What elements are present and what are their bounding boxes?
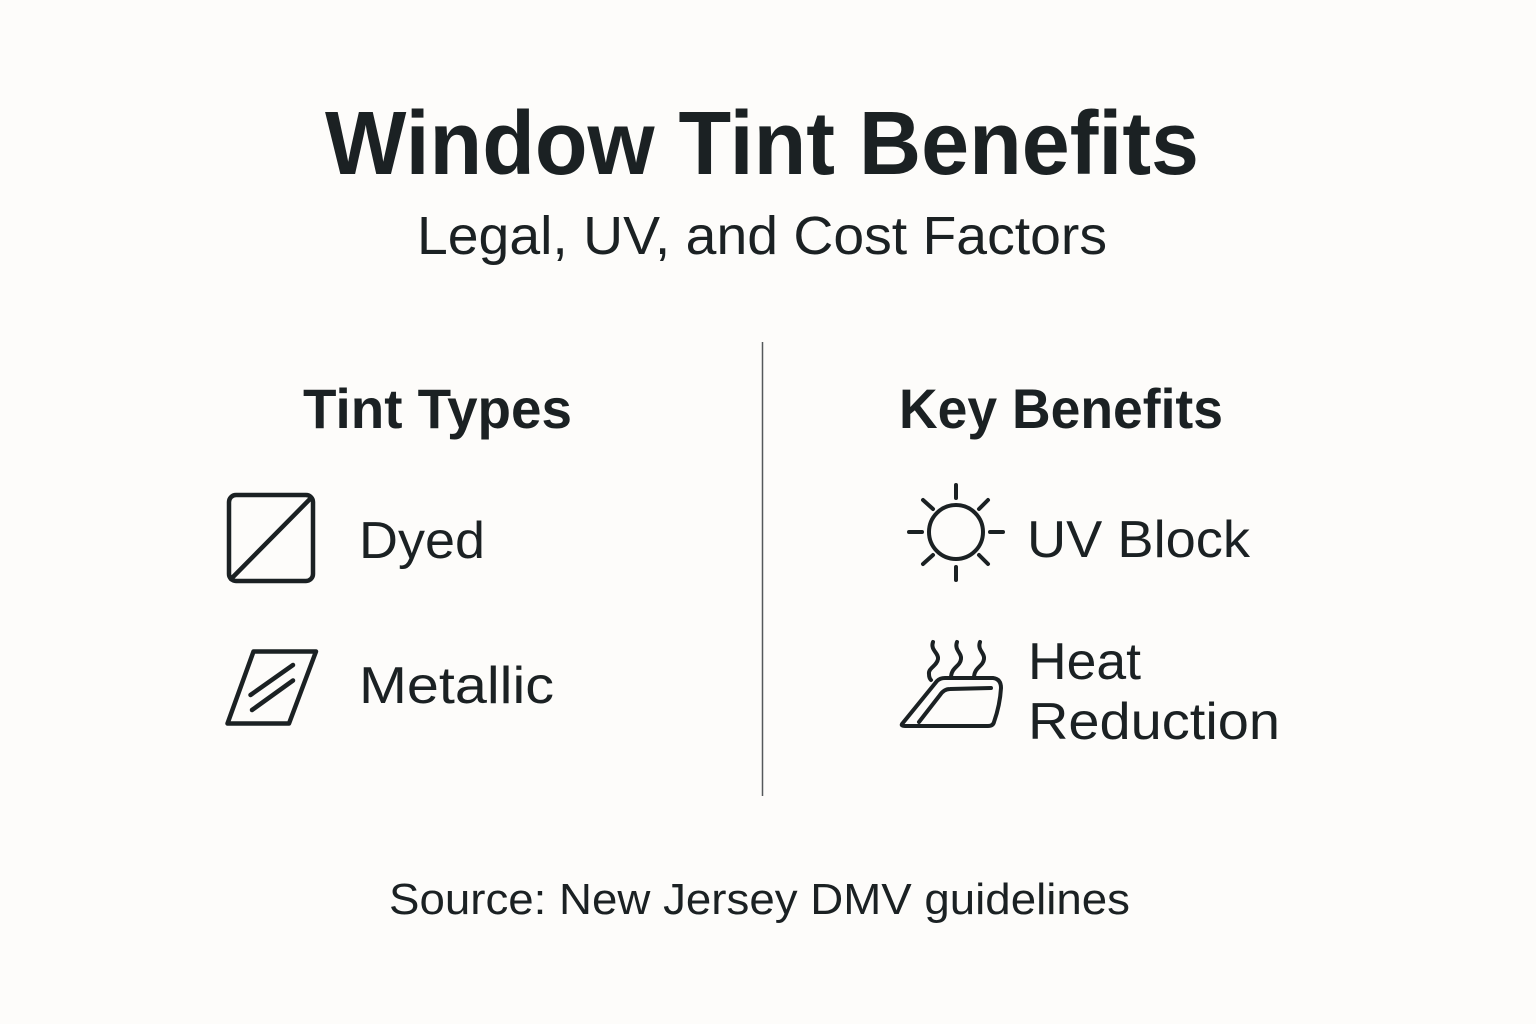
heading: tint types: Tint Types [303,377,572,440]
title: Window Tint Benefits [325,94,1199,194]
label: heat reduction [1028,633,1280,751]
source note: Source: New Jersey DMV guidelines [389,875,1130,924]
subtitle: Legal, UV, and Cost Factors [417,206,1107,266]
label: uv block: UV Block [1027,511,1251,569]
icon: dyed tint square [229,495,313,581]
label: dyed: Dyed [359,512,485,570]
icon: metallic tint parallelogram [228,652,316,724]
panel: key benefits [899,377,1280,751]
icon: heat rising from window [902,642,1001,726]
label: heat reduction: Heat [1028,633,1142,691]
label: heat reduction: Reduction [1028,693,1280,751]
label: metallic: Metallic [359,657,554,715]
heading: key benefits: Key Benefits [899,377,1223,440]
icon: sun [909,485,1003,580]
panel: tint types [228,377,572,724]
